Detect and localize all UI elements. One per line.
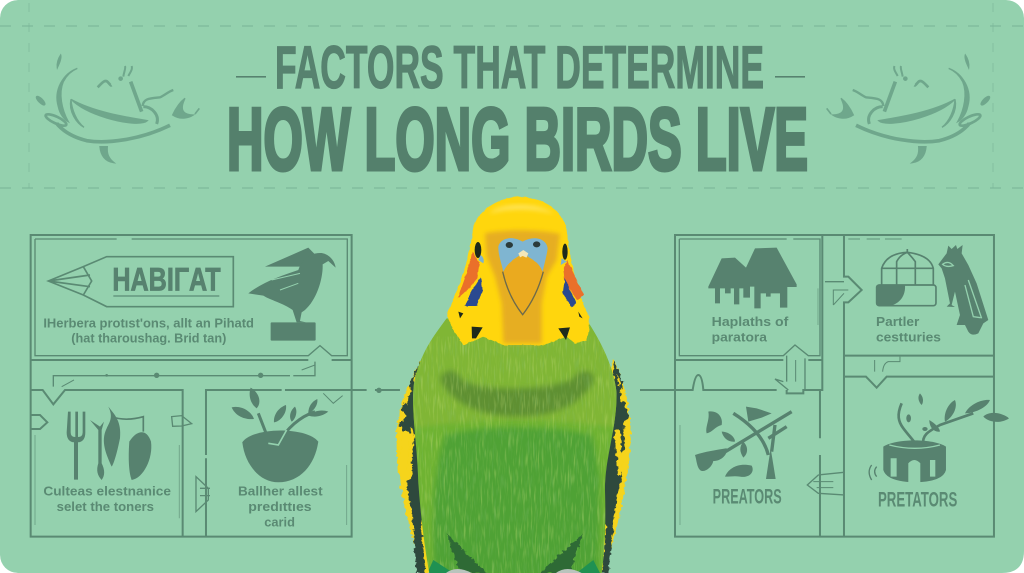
habitat pennant — [48, 257, 233, 307]
habitat heading: HABIΓAT — [112, 261, 221, 297]
panel: predators left — [695, 407, 792, 508]
tail tips — [427, 560, 600, 573]
side eyes — [475, 242, 568, 265]
icon: branch with leaves — [695, 407, 792, 479]
header guide lines — [0, 3, 1024, 188]
diagram frame lines left — [31, 235, 400, 537]
feet — [446, 569, 582, 573]
parakeet illustration — [396, 197, 631, 573]
lower feather tips — [447, 533, 583, 573]
head shape — [447, 197, 589, 345]
neck spots — [458, 312, 583, 340]
orange cheek left — [458, 252, 479, 298]
body base — [410, 317, 623, 573]
beak outline — [503, 272, 543, 315]
face shade — [485, 230, 560, 343]
habitat text: IHerbera protıst'ons, allt an Pihatd — [43, 317, 254, 331]
icon: nest left — [35, 55, 199, 163]
plants text: Ballher allest — [238, 485, 323, 499]
parrot detail — [943, 262, 982, 318]
head — [447, 197, 589, 345]
panel group: right diagram — [640, 235, 1009, 537]
icon: nest right — [827, 55, 991, 163]
panel: partner — [876, 245, 988, 345]
hazards text line 2: paratora — [712, 331, 768, 345]
line markers — [105, 373, 382, 393]
predators label left: PREATORS — [713, 484, 782, 508]
panel group: left diagram — [31, 235, 400, 537]
wing right — [590, 360, 631, 573]
blue spot right — [563, 278, 577, 307]
icon: bowl with sprout — [232, 388, 328, 482]
icon: fork and produce — [67, 407, 151, 480]
diet text line 2: selet the toners — [57, 500, 154, 514]
title rule right — [775, 76, 805, 78]
eye marks — [506, 241, 540, 248]
body — [413, 318, 617, 573]
predators label right: PRETATORS — [878, 488, 957, 512]
icon: bowl and sprig — [869, 393, 1009, 483]
feather texture light — [410, 337, 623, 573]
upper chest — [413, 318, 616, 428]
belly — [433, 427, 600, 573]
orange cheek right — [563, 260, 584, 300]
panel: predators right — [869, 393, 1009, 512]
plants text line 3: carid — [264, 516, 295, 530]
icon: parrot — [938, 245, 988, 335]
title — [227, 34, 808, 188]
beak — [503, 256, 543, 314]
panel: habitat — [43, 248, 336, 345]
blue spot left — [465, 277, 483, 306]
diet text: Culteas elestnanice — [43, 485, 171, 499]
habitat text line 2: (hat tharoushag. Brid tan) — [71, 331, 226, 345]
blue cere — [498, 238, 548, 272]
cere highlight — [518, 250, 528, 265]
diagram frame lines right — [640, 235, 994, 537]
hazards text: Haplaths of — [712, 315, 789, 329]
icon: cage — [876, 249, 936, 306]
plants text line 2: predıttıes — [248, 500, 312, 514]
panel: diet — [43, 407, 171, 514]
icon: raven on a block — [248, 248, 336, 341]
icon: hills and trees — [708, 248, 797, 308]
feather texture dark — [410, 337, 623, 573]
partner text line 2: cestturies — [876, 331, 941, 345]
panel: plants — [232, 388, 328, 530]
chest shadow band — [440, 371, 594, 417]
title rule left — [236, 76, 266, 78]
wing left — [396, 357, 437, 573]
habitat heading underline — [113, 295, 219, 297]
partner text: Partler — [876, 315, 919, 329]
crown highlight — [490, 205, 553, 214]
panel: hazards — [708, 248, 797, 345]
